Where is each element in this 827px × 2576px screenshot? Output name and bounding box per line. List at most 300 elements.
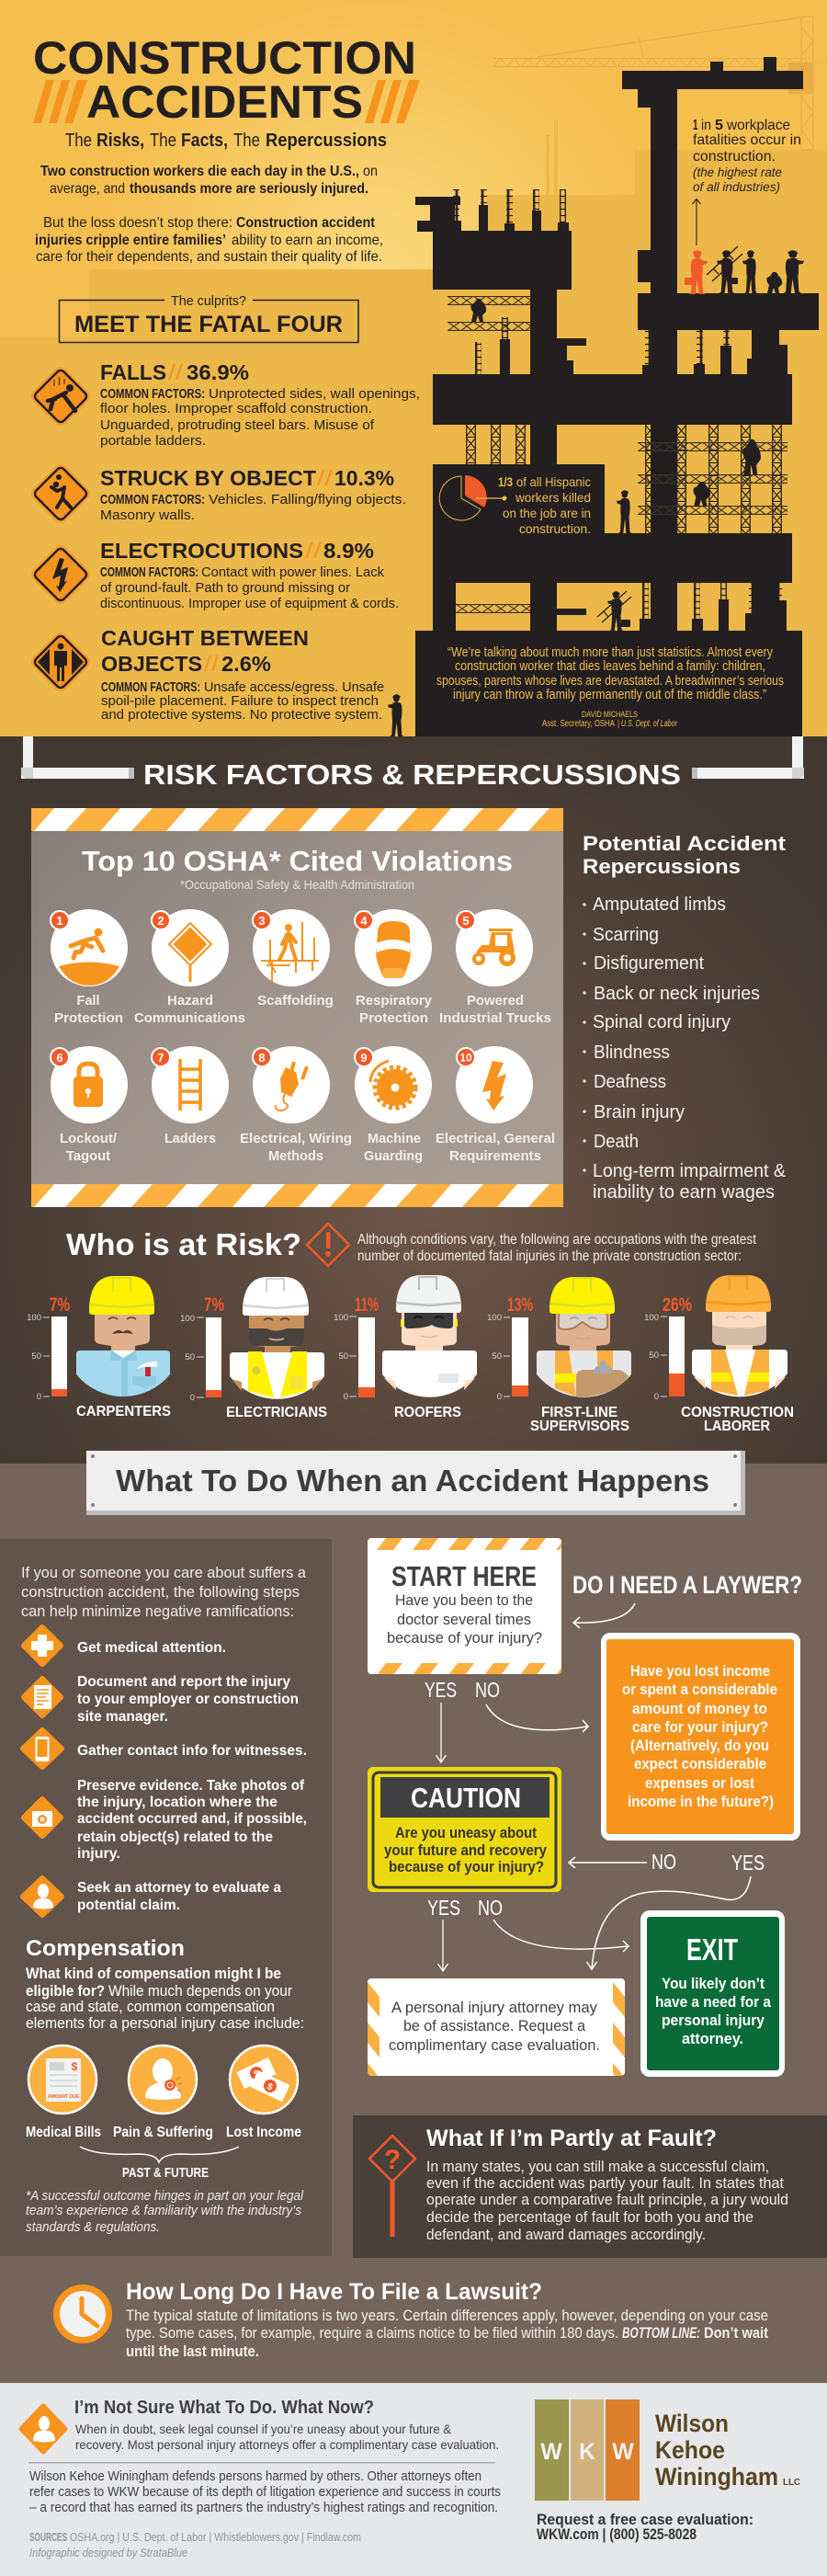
violation 4: respiratory protection: Respiratory — [356, 993, 433, 1009]
worker chart: first-line supervisors: 50 — [492, 1351, 502, 1362]
violation 5: powered industrial trucks — [439, 909, 551, 1026]
text block: intro: care for their dependents, and sustain their quality of life. — [36, 249, 382, 265]
icon: falls sign — [28, 364, 93, 428]
panel: steps left column — [0, 1539, 332, 2256]
worker chart: carpenters — [27, 1276, 171, 1419]
worker chart: electricians: 7% — [204, 1294, 224, 1316]
flow: exit sign: EXIT — [686, 1932, 738, 1966]
text block: potential accident repercussions: Amputated limbs — [593, 895, 726, 915]
text: compensation intro: While much depends on your — [108, 1983, 292, 2000]
violation 3: scaffolding: Scaffolding — [257, 993, 334, 1009]
flow: attorney box: A personal injury attorney may — [391, 1999, 597, 2016]
text block: potential accident repercussions: Deafness — [594, 1072, 666, 1092]
panel: fatal four falls: portable ladders. — [100, 433, 206, 449]
text: first yes no — [425, 1678, 500, 1702]
text: steps intro: construction accident, the following steps — [21, 1583, 300, 1601]
text: steps intro — [21, 1564, 307, 1620]
text: request a free case evaluation: WKW.com | (800) 525-8028 — [537, 2526, 697, 2543]
panel: how long to file a lawsuit: type. Some cases, for example, require a claims notice to be filed within 180 days. — [126, 2325, 618, 2342]
violation 1: fall protection: 1 — [56, 914, 63, 928]
violation 10: electrical general: 10 — [459, 1052, 472, 1065]
step: preserve evidence: injury. — [77, 1846, 120, 1862]
worker chart: first-line supervisors — [487, 1277, 631, 1434]
callout: 1 in 5: (the highest rate — [693, 165, 782, 179]
violation 9: machine guarding — [355, 1046, 432, 1164]
icon: lost income — [230, 2046, 298, 2114]
flow: start here box — [368, 1538, 561, 1674]
quote: DAVID MICHAELS — [582, 710, 638, 720]
violation 9: machine guarding: Machine — [368, 1131, 421, 1146]
subtitle: The — [65, 131, 92, 151]
text block: potential accident repercussions: Spinal cord injury — [593, 1012, 731, 1032]
heading: top 10: Top 10 OSHA* Cited Violations — [82, 845, 513, 877]
flow: exit sign: You likely don’t — [662, 1976, 765, 1992]
title: CONSTRUCTION — [33, 32, 416, 84]
worker chart: roofers — [334, 1275, 477, 1420]
panel: fatal four caught between objects: CAUGHT BETWEEN — [101, 626, 309, 650]
violation 6: lockout tagout: Lockout/ — [60, 1131, 118, 1146]
violation 6: lockout tagout: 6 — [56, 1051, 63, 1065]
violation 8: electrical wiring: Methods — [268, 1148, 323, 1164]
worker chart: electricians: 0 — [190, 1393, 195, 1403]
violation 10: electrical general: Electrical, General — [436, 1131, 555, 1146]
panel: fatal four electrocutions: COMMON FACTORS: — [100, 564, 198, 580]
worker chart: roofers: 50 — [338, 1351, 348, 1362]
worker chart: first-line supervisors: 100 — [487, 1313, 502, 1323]
panel: what if I'm partly at fault: What If I’m Partly at Fault? — [426, 2126, 717, 2151]
panel: fatal four struck by object: Vehicles. Falling/flying objects. — [209, 492, 406, 507]
icon: caught sign — [28, 630, 93, 694]
flow: start here box: Have you been to the — [395, 1591, 533, 1609]
text: compensation intro: What kind of compensation might I be — [26, 1966, 281, 1982]
text: compensation footnote: *A successful outcome hinges in part on your legal — [26, 2188, 304, 2204]
icon: struck sign — [28, 462, 93, 526]
panel: what if I'm partly at fault — [353, 2115, 827, 2258]
icon: medical bills — [28, 2046, 96, 2114]
text block: potential accident repercussions: inability to earn wages — [593, 1182, 775, 1203]
worker chart: carpenters: CARPENTERS — [76, 1404, 171, 1419]
text: second yes no — [651, 1850, 765, 1875]
chart: Hispanic workers pie: workers killed — [515, 490, 591, 505]
violation 9: machine guarding: Guarding — [364, 1148, 423, 1164]
panel: fatal four struck by object: 10.3% — [334, 466, 394, 490]
violation 4: respiratory protection: 4 — [360, 914, 368, 928]
step: document and report: site manager. — [77, 1709, 168, 1725]
step: preserve evidence: the injury, location where the — [77, 1795, 278, 1810]
text block: intro: Construction accident — [236, 215, 376, 231]
callout: 1 in 5: construction. — [693, 149, 776, 165]
heading sign: what to do when an accident happens: What To Do When an Accident Happens — [116, 1464, 709, 1498]
flow: caution sign: because of your injury? — [389, 1859, 544, 1875]
worker chart: electricians: ELECTRICIANS — [226, 1405, 327, 1420]
panel: fatal four caught between objects — [28, 626, 384, 723]
heading: risk factors and repercussions: RISK FACTORS & REPERCUSSIONS — [143, 758, 681, 791]
panel: fatal four falls: // — [168, 360, 183, 385]
flow: caution sign: CAUTION — [411, 1782, 521, 1814]
logo: Wilson Kehoe Winingham: K — [579, 2439, 595, 2465]
panel: how long to file a lawsuit: The typical statute of limitations is two years. Certain differences apply, however, depending on your case — [126, 2308, 768, 2324]
quote — [436, 645, 784, 729]
violation 7: ladders: Ladders — [164, 1131, 216, 1146]
panel: fatal four falls — [28, 360, 420, 449]
icon: question sign — [369, 2136, 415, 2237]
icon: clock — [53, 2285, 112, 2343]
quote: Asst. Secretary, OSHA — [542, 719, 615, 729]
icon: injured orange worker — [685, 250, 708, 294]
flow: lost income box: income in the future?) — [628, 1794, 774, 1810]
icon: brace — [80, 2147, 239, 2162]
panel: fatal four caught between objects: and protective systems. No protective system. — [101, 707, 382, 723]
panel: fatal four electrocutions: Contact with power lines. Lack — [201, 564, 384, 580]
worker chart: construction laborer: LABORER — [704, 1419, 770, 1434]
worker chart: first-line supervisors: 13% — [507, 1294, 533, 1316]
violation 5: powered industrial trucks: Industrial Trucks — [439, 1010, 551, 1026]
step: document and report — [24, 1674, 299, 1725]
step: gather contact info — [23, 1730, 307, 1767]
text block: intro: thousands more are seriously injured. — [130, 181, 368, 197]
panel: fatal four electrocutions: ELECTROCUTIONS — [100, 539, 303, 563]
step: preserve evidence — [24, 1778, 307, 1862]
step: seek an attorney — [23, 1878, 281, 1915]
panel: footer advice: refer cases to WKW because of its depth of litigation experience and success in courts — [29, 2485, 501, 2500]
flow: lost income box: or spent a considerable — [622, 1681, 777, 1698]
panel: fatal four caught between objects: COMMON FACTORS: — [101, 679, 200, 695]
worker chart: electricians: 100 — [180, 1314, 195, 1324]
panel: what if I'm partly at fault: In many states, you can still make a successful claim, — [426, 2158, 769, 2175]
text: sources — [29, 2530, 361, 2559]
panel: fatal four electrocutions: of ground-fault. Path to ground missing or — [100, 580, 350, 596]
subtitle: The — [150, 131, 176, 151]
violation 8: electrical wiring: 8 — [258, 1051, 266, 1065]
text: sources: Infographic designed by StrataBlue — [29, 2546, 187, 2559]
step: preserve evidence: retain object(s) related to the — [77, 1829, 273, 1845]
subtitle — [65, 131, 387, 151]
text: who is at risk description: Although conditions vary, the following are occupations with the greatest — [357, 1232, 757, 1248]
flow: exit sign: have a need for a — [655, 1994, 772, 2011]
worker chart: construction laborer: 50 — [649, 1351, 659, 1361]
callout: 1 in 5 — [693, 118, 801, 245]
text: compensation intro: elements for a personal injury case include: — [26, 2015, 304, 2032]
flow: lost income box: expect considerable — [634, 1756, 766, 1772]
panel: fatal four caught between objects: Unsafe access/egress. Unsafe — [204, 679, 384, 695]
chart: Hispanic workers pie: 1/3 — [498, 474, 513, 489]
chart: Hispanic workers pie: of all Hispanic — [516, 474, 591, 489]
worker chart: roofers: 11% — [355, 1294, 379, 1316]
callout: 1 in 5: of all industries) — [693, 180, 780, 194]
text: sources: OSHA.org | U.S. Dept. of Labor | Whistleblowers.gov | Findlaw.com — [70, 2530, 361, 2544]
text: compensation labels: Pain & Suffering — [113, 2125, 213, 2140]
text block: potential accident repercussions: Repercussions — [583, 855, 741, 878]
icon: medical bills: $ — [72, 2060, 78, 2073]
step: gather contact info: Gather contact info for witnesses. — [77, 1743, 307, 1759]
text block: intro: ability to earn an income, — [232, 233, 383, 248]
panel: what if I'm partly at fault: even if the accident was partly your fault. In states that — [426, 2174, 784, 2192]
panel: how long to file a lawsuit: BOTTOM LINE: — [622, 2325, 700, 2342]
icon: attorney diamond — [21, 2406, 65, 2452]
flow: lost income box: (Alternatively, do you — [630, 1738, 769, 1754]
callout: 1 in 5: in — [701, 118, 711, 133]
violation 3: scaffolding — [253, 909, 334, 1009]
panel: fatal four electrocutions: 8.9% — [323, 539, 374, 563]
quote: | U.S. Dept. of Labor — [617, 719, 677, 729]
callout: 1 in 5: 5 — [715, 118, 723, 133]
arrow: to start here — [573, 1603, 635, 1628]
scaffolding and rebar — [447, 189, 787, 619]
text block: potential accident repercussions: Disfigurement — [594, 953, 704, 974]
panel: fatal four struck by object: COMMON FACTORS: — [100, 492, 205, 507]
step: get medical attention: Get medical attention. — [77, 1640, 226, 1656]
worker chart: carpenters: 0 — [37, 1392, 41, 1402]
violation 2: hazard communications: 2 — [157, 914, 164, 928]
worker chart: roofers: 0 — [344, 1392, 348, 1402]
logo: Wilson Kehoe Winingham: Wilson — [655, 2410, 729, 2437]
icon: question sign: ? — [384, 2145, 401, 2175]
text block: potential accident repercussions: Potential Accident — [583, 832, 787, 855]
flow: lost income box: care for your injury? — [632, 1719, 768, 1736]
text: compensation labels: Medical Bills — [26, 2125, 101, 2140]
icon: title slashes — [33, 80, 420, 123]
panel: fatal four struck by object — [28, 462, 406, 526]
text block: intro — [35, 164, 383, 265]
text: compensation footnote — [26, 2188, 304, 2235]
chart: Hispanic workers pie — [439, 474, 591, 536]
subtitle: Repercussions — [266, 131, 387, 151]
panel: footer advice: Wilson Kehoe Winingham defends persons harmed by others. Other attorneys often — [29, 2469, 481, 2484]
worker chart: construction laborer: 26% — [663, 1294, 692, 1316]
icon: white header brackets — [21, 736, 804, 779]
text: sources: SOURCES — [29, 2530, 67, 2544]
logo: Wilson Kehoe Winingham: W — [540, 2439, 562, 2465]
violation 3: scaffolding: 3 — [258, 914, 266, 928]
violation 5: powered industrial trucks: Powered — [467, 993, 524, 1009]
text: request a free case evaluation — [537, 2512, 753, 2543]
panel: how long to file a lawsuit — [53, 2279, 768, 2360]
panel: fatal four electrocutions — [28, 539, 399, 611]
violation 9: machine guarding: 9 — [360, 1051, 368, 1065]
logo: Wilson Kehoe Winingham: LLC — [783, 2478, 800, 2488]
heading: compensation: Compensation — [26, 1936, 185, 1961]
text: past and future: PAST & FUTURE — [122, 2165, 209, 2181]
building silhouette — [415, 57, 819, 736]
text block: intro: Two construction workers die each day in the U.S., — [40, 164, 359, 179]
panel: footer advice: When in doubt, seek legal counsel if you’re uneasy about your future & — [75, 2422, 452, 2436]
violation 5: powered industrial trucks: 5 — [462, 914, 470, 928]
text block: intro: injuries cripple entire families’ — [35, 233, 226, 248]
worker chart: carpenters: 50 — [31, 1351, 41, 1362]
violation 7: ladders — [152, 1046, 229, 1146]
heading: who is at risk: Who is at Risk? — [66, 1227, 301, 1261]
flow: start here box: START HERE — [391, 1560, 537, 1592]
icon: medical bills: AMOUNT DUE — [48, 2094, 80, 2100]
panel: how long to file a lawsuit: until the last minute. — [126, 2343, 259, 2360]
panel: what if I'm partly at fault: operate under a comparative fault principle, a jury would — [426, 2191, 788, 2208]
heading sign: what to do when an accident happens — [86, 1451, 745, 1515]
icon: electrocution sign — [28, 542, 93, 607]
panel: top 10 OSHA violations — [31, 808, 563, 1207]
flow: caution sign: your future and recovery — [384, 1842, 548, 1859]
panel: how long to file a lawsuit: How Long Do I Have To File a Lawsuit? — [126, 2279, 542, 2305]
text: compensation footnote: team’s experience & familiarity with the industry’s — [26, 2203, 301, 2218]
panel: fatal four electrocutions: // — [305, 539, 322, 564]
worker chart: roofers: ROOFERS — [394, 1405, 461, 1420]
step: preserve evidence: accident occurred and, if possible, — [77, 1811, 307, 1827]
icon: warning diamond — [307, 1224, 349, 1266]
callout: 1 in 5: fatalities occur in — [693, 132, 801, 148]
title: ACCIDENTS — [86, 76, 363, 128]
panel: what if I'm partly at fault: defendant, and award damages accordingly. — [426, 2226, 706, 2243]
flow: start here box: doctor several times — [397, 1611, 531, 1628]
icon: lost income: $ — [253, 2069, 262, 2080]
worker chart: first-line supervisors: FIRST-LINE — [541, 1405, 617, 1420]
text: compensation footnote: standards & regulations. — [26, 2219, 160, 2235]
text block: intro: average, and — [50, 181, 125, 197]
heading: meet the fatal four — [59, 293, 358, 342]
panel: footer background — [0, 2383, 827, 2576]
violation 6: lockout tagout — [51, 1046, 128, 1164]
worker chart: electricians: 50 — [185, 1352, 195, 1362]
violation 2: hazard communications: Communications — [134, 1010, 245, 1026]
title — [33, 32, 416, 128]
violation 4: respiratory protection — [355, 909, 433, 1026]
text block: potential accident repercussions: Blindness — [594, 1043, 670, 1063]
arrow: no to lost income — [486, 1704, 588, 1732]
text: steps intro: can help minimize negative ramifications: — [21, 1602, 294, 1620]
flow: exit sign — [640, 1910, 785, 2077]
text: compensation intro: case and state, common compensation — [26, 1999, 275, 2015]
panel: how long to file a lawsuit: Don’t wait — [704, 2325, 768, 2342]
violation 2: hazard communications — [134, 909, 245, 1026]
flow: lost income box: amount of money to — [632, 1701, 767, 1717]
panel: footer advice: – a record that has earned its partners the industry’s highest ratings and recognition. — [29, 2501, 498, 2515]
worker chart: construction laborer — [644, 1275, 794, 1434]
chart: Hispanic workers pie: construction. — [519, 521, 591, 536]
text: compensation intro: eligible for? — [26, 1983, 105, 2000]
subtitle: Risks, — [96, 131, 144, 151]
text block: potential accident repercussions — [583, 832, 787, 1203]
text: who is at risk description: number of documented fatal injuries in the private construction sector: — [357, 1248, 742, 1264]
arrow: yes to attorney — [586, 1876, 751, 1969]
flow: exit sign: personal injury — [662, 2012, 765, 2029]
worker chart: carpenters: 7% — [50, 1294, 70, 1316]
panel: fatal four caught between objects: // — [204, 652, 219, 677]
violation 4: respiratory protection: Protection — [359, 1010, 428, 1026]
step: get medical attention — [24, 1627, 226, 1664]
violation 6: lockout tagout: Tagout — [66, 1148, 110, 1164]
text block: potential accident repercussions: Back or neck injuries — [594, 984, 760, 1004]
text: first yes no: YES — [425, 1678, 457, 1702]
arrow: no to exit — [493, 1920, 629, 1952]
logo: Wilson Kehoe Winingham: Winingham — [655, 2463, 778, 2491]
flow: exit sign: attorney. — [682, 2031, 743, 2047]
quote: “We’re talking about much more than just statistics. Almost every — [447, 645, 774, 660]
quote: injury can throw a family permanently out of the middle class.” — [453, 688, 766, 702]
worker chart: construction laborer: 0 — [654, 1392, 659, 1402]
text: third yes no: NO — [478, 1896, 503, 1920]
panel: dark risk section background — [0, 736, 827, 1464]
panel: fatal four falls: COMMON FACTORS: — [100, 386, 205, 402]
flow: caution sign — [368, 1767, 561, 1892]
logo: Wilson Kehoe Winingham: Kehoe — [655, 2436, 725, 2464]
text block: intro: But the loss doesn’t stop there: — [43, 215, 232, 231]
violation 10: electrical general: Requirements — [449, 1148, 541, 1164]
text block: potential accident repercussions: Death — [594, 1132, 639, 1152]
flow: lost income box: expenses or lost — [645, 1775, 754, 1792]
panel: footer advice: I’m Not Sure What To Do. What Now? — [74, 2398, 374, 2418]
worker chart: carpenters: 100 — [27, 1313, 41, 1323]
step: seek an attorney: Seek an attorney to evaluate a — [77, 1880, 281, 1896]
panel: fatal four struck by object: STRUCK BY OBJECT — [100, 466, 316, 490]
panel: footer advice: recovery. Most personal injury attorneys offer a complimentary case evaluation. — [75, 2437, 499, 2452]
flow: lost income box: Have you lost income — [630, 1663, 770, 1680]
step: document and report: to your employer or construction — [77, 1692, 299, 1707]
flow: attorney box — [368, 1978, 625, 2076]
panel: fatal four caught between objects: OBJECTS — [101, 652, 202, 676]
text: first yes no: NO — [475, 1678, 500, 1702]
icon: lost income: $ — [266, 2081, 275, 2093]
panel: gold hero background — [0, 0, 827, 736]
panel: fatal four struck by object: // — [317, 466, 333, 491]
worker chart: first-line supervisors: SUPERVISORS — [530, 1419, 629, 1434]
violation 7: ladders: 7 — [157, 1051, 164, 1065]
step: seek an attorney: potential claim. — [77, 1898, 180, 1913]
text: request a free case evaluation: Request a free case evaluation: — [537, 2512, 753, 2528]
violation 8: electrical wiring — [240, 1046, 352, 1164]
step: preserve evidence: Preserve evidence. Take photos of — [77, 1778, 305, 1794]
icon: background crane — [493, 17, 827, 150]
subtitle: Facts, — [181, 131, 228, 151]
logo: Wilson Kehoe Winingham — [535, 2399, 800, 2501]
workers silhouettes — [388, 246, 804, 736]
text: who is at risk description — [357, 1232, 757, 1264]
text: second yes no: NO — [651, 1850, 676, 1874]
panel: fatal four caught between objects: 2.6% — [221, 652, 271, 676]
panel: fatal four electrocutions: discontinuous. Improper use of equipment & cords. — [100, 596, 399, 611]
violation 1: fall protection: Fall — [77, 993, 99, 1009]
panel: fatal four struck by object: Masonry walls. — [100, 507, 195, 523]
icon: pain and suffering — [129, 2046, 197, 2114]
chart: Hispanic workers pie: on the job are in — [503, 506, 591, 520]
arrow: no to caution — [569, 1857, 647, 1868]
heading: meet the fatal four: MEET THE FATAL FOUR — [74, 312, 343, 337]
quote: construction worker that dies leaves behind a family: children, — [455, 659, 765, 674]
text: third yes no: YES — [427, 1896, 460, 1920]
worker chart: construction laborer: CONSTRUCTION — [681, 1405, 794, 1420]
violation 8: electrical wiring: Electrical, Wiring — [240, 1131, 352, 1146]
panel: fatal four falls: Unprotected sides, wall openings, — [209, 386, 420, 402]
arrow: yes to caution — [436, 1703, 447, 1762]
panel: fatal four falls: floor holes. Improper scaffold construction. — [100, 401, 372, 416]
text block: potential accident repercussions: Brain injury — [594, 1102, 685, 1123]
panel: fatal four falls: Unguarded, protruding steel bars. Misuse of — [100, 417, 375, 433]
violation 1: fall protection — [51, 909, 128, 1026]
panel: fatal four caught between objects: spoil-pile placement. Failure to inspect trench — [101, 693, 379, 709]
text block: potential accident repercussions: Long-term impairment & — [593, 1161, 787, 1181]
flow: start here box: because of your injury? — [387, 1629, 542, 1647]
text: steps intro: If you or someone you care about suffers a — [21, 1564, 307, 1581]
flow: caution sign: Are you uneasy about — [395, 1825, 537, 1841]
flow: attorney box: be of assistance. Request a — [403, 2017, 586, 2035]
callout: 1 in 5: workplace — [726, 118, 790, 133]
worker chart: roofers: 100 — [334, 1313, 348, 1323]
text block: potential accident repercussions: Scarring — [593, 925, 659, 945]
worker chart: first-line supervisors: 0 — [497, 1392, 502, 1402]
callout: 1 in 5: 1 — [693, 118, 698, 133]
panel: fatal four falls: 36.9% — [187, 360, 249, 384]
panel: footer advice — [21, 2398, 501, 2559]
logo: Wilson Kehoe Winingham: W — [612, 2439, 634, 2465]
worker chart: construction laborer: 100 — [644, 1313, 659, 1323]
step: document and report: Document and report the injury — [77, 1674, 290, 1690]
